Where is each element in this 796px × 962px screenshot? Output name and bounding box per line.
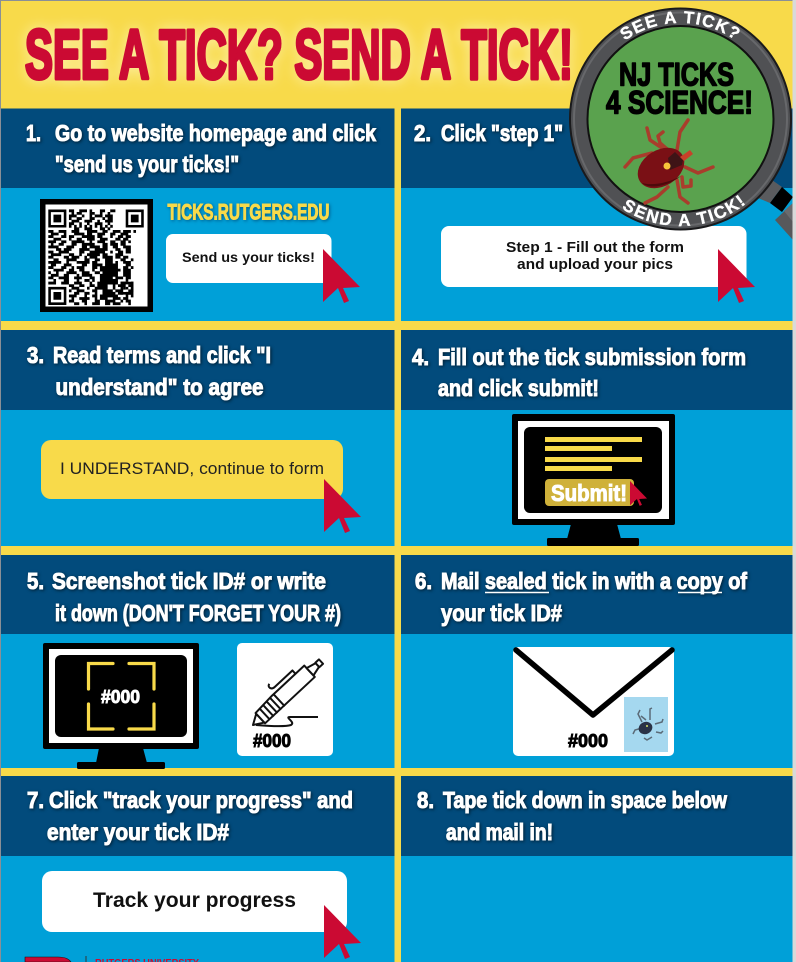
step 5 heading xyxy=(27,568,341,626)
cursor xyxy=(324,479,361,533)
panel: step 4 xyxy=(401,330,792,546)
step 4 heading xyxy=(412,344,746,401)
step 2 heading: 2. xyxy=(414,120,431,146)
panel: step 1 xyxy=(1,108,394,321)
step 1 heading xyxy=(26,120,376,177)
stamp with tick xyxy=(624,697,668,752)
step 3 heading: 3. xyxy=(27,342,44,368)
step 8 heading: and mail in! xyxy=(446,819,553,845)
step 4 heading: and click submit! xyxy=(438,375,599,401)
step 5 heading: it down (DON'T FORGET YOUR #) xyxy=(55,600,341,626)
step 1 heading: Go to website homepage and click xyxy=(55,120,376,146)
badge title: NJ TICKS xyxy=(619,56,734,92)
step 7 heading xyxy=(27,787,353,845)
button: step 1 form: and upload your pics xyxy=(517,257,673,273)
panel: step 2 xyxy=(401,108,792,321)
magnifying glass badge xyxy=(569,8,792,240)
panel: step 7 xyxy=(1,776,394,962)
button: step 1 form xyxy=(441,226,746,287)
step 6 heading: your tick ID# xyxy=(441,600,562,626)
ring text: see a tick: SEE A TICK? xyxy=(620,11,740,40)
button: send us your ticks xyxy=(166,234,332,283)
button: track your progress: Track your progress xyxy=(93,888,296,912)
step 3 heading: understand" to agree xyxy=(56,374,264,400)
button: track your progress xyxy=(42,871,347,932)
ring text: send a tick: SEND A TICK! xyxy=(623,194,745,226)
step 2 heading: Click "step 1" xyxy=(441,120,563,146)
step 6 heading xyxy=(415,568,747,626)
button: step 1 form: Step 1 - Fill out the form xyxy=(506,240,684,256)
handle xyxy=(758,180,793,240)
step 1 heading: "send us your ticks!" xyxy=(55,151,239,177)
step 7 heading: 7. xyxy=(27,787,44,813)
icon: monitor with form: Submit! xyxy=(551,480,627,506)
step 6 heading: 6. xyxy=(415,568,432,594)
step 3 heading xyxy=(27,342,271,400)
icon: monitor with form xyxy=(512,414,675,546)
step 8 heading: 8. xyxy=(417,787,434,813)
button: I understand: I UNDERSTAND, continue to form xyxy=(60,460,324,478)
step 3 heading: Read terms and click "I xyxy=(53,342,271,368)
step 4 heading: 4. xyxy=(412,344,429,370)
panel: step 5 xyxy=(1,555,394,769)
icon: monitor with screenshot xyxy=(43,643,199,769)
icon: envelope xyxy=(513,647,674,756)
button: I understand xyxy=(41,440,343,499)
cursor xyxy=(324,905,361,959)
step 1 heading: 1. xyxy=(26,120,41,146)
icon: envelope: #000 xyxy=(568,731,608,751)
step 5 heading: 5. xyxy=(27,568,44,594)
cursor xyxy=(323,249,360,303)
icon: note with pen xyxy=(237,643,333,756)
panel: step 8 xyxy=(401,776,792,962)
badge title: 4 SCIENCE! xyxy=(606,84,753,120)
website URL: TICKS.RUTGERS.EDU xyxy=(168,200,330,224)
step 6 heading: Mail sealed tick in with a copy of xyxy=(441,568,747,594)
icon: note with pen: #000 xyxy=(253,731,291,751)
step 2 heading xyxy=(414,120,563,146)
button: send us your ticks: Send us your ticks! xyxy=(182,250,315,265)
step 7 heading: enter your tick ID# xyxy=(47,819,229,845)
panel: step 3 xyxy=(1,330,394,546)
step 8 heading xyxy=(417,787,727,845)
step 4 heading: Fill out the tick submission form xyxy=(438,344,746,370)
step 5 heading: Screenshot tick ID# or write xyxy=(52,568,326,594)
step 7 heading: Click "track your progress" and xyxy=(49,787,353,813)
cursor xyxy=(718,249,755,303)
icon: tick xyxy=(625,120,713,203)
Rutgers logo, cropped xyxy=(25,956,199,962)
panel: step 6 xyxy=(401,555,792,768)
step 8 heading: Tape tick down in space below xyxy=(443,787,727,813)
badge title xyxy=(606,56,753,120)
QR code xyxy=(40,199,153,312)
icon: monitor with screenshot: #000 xyxy=(101,687,140,707)
